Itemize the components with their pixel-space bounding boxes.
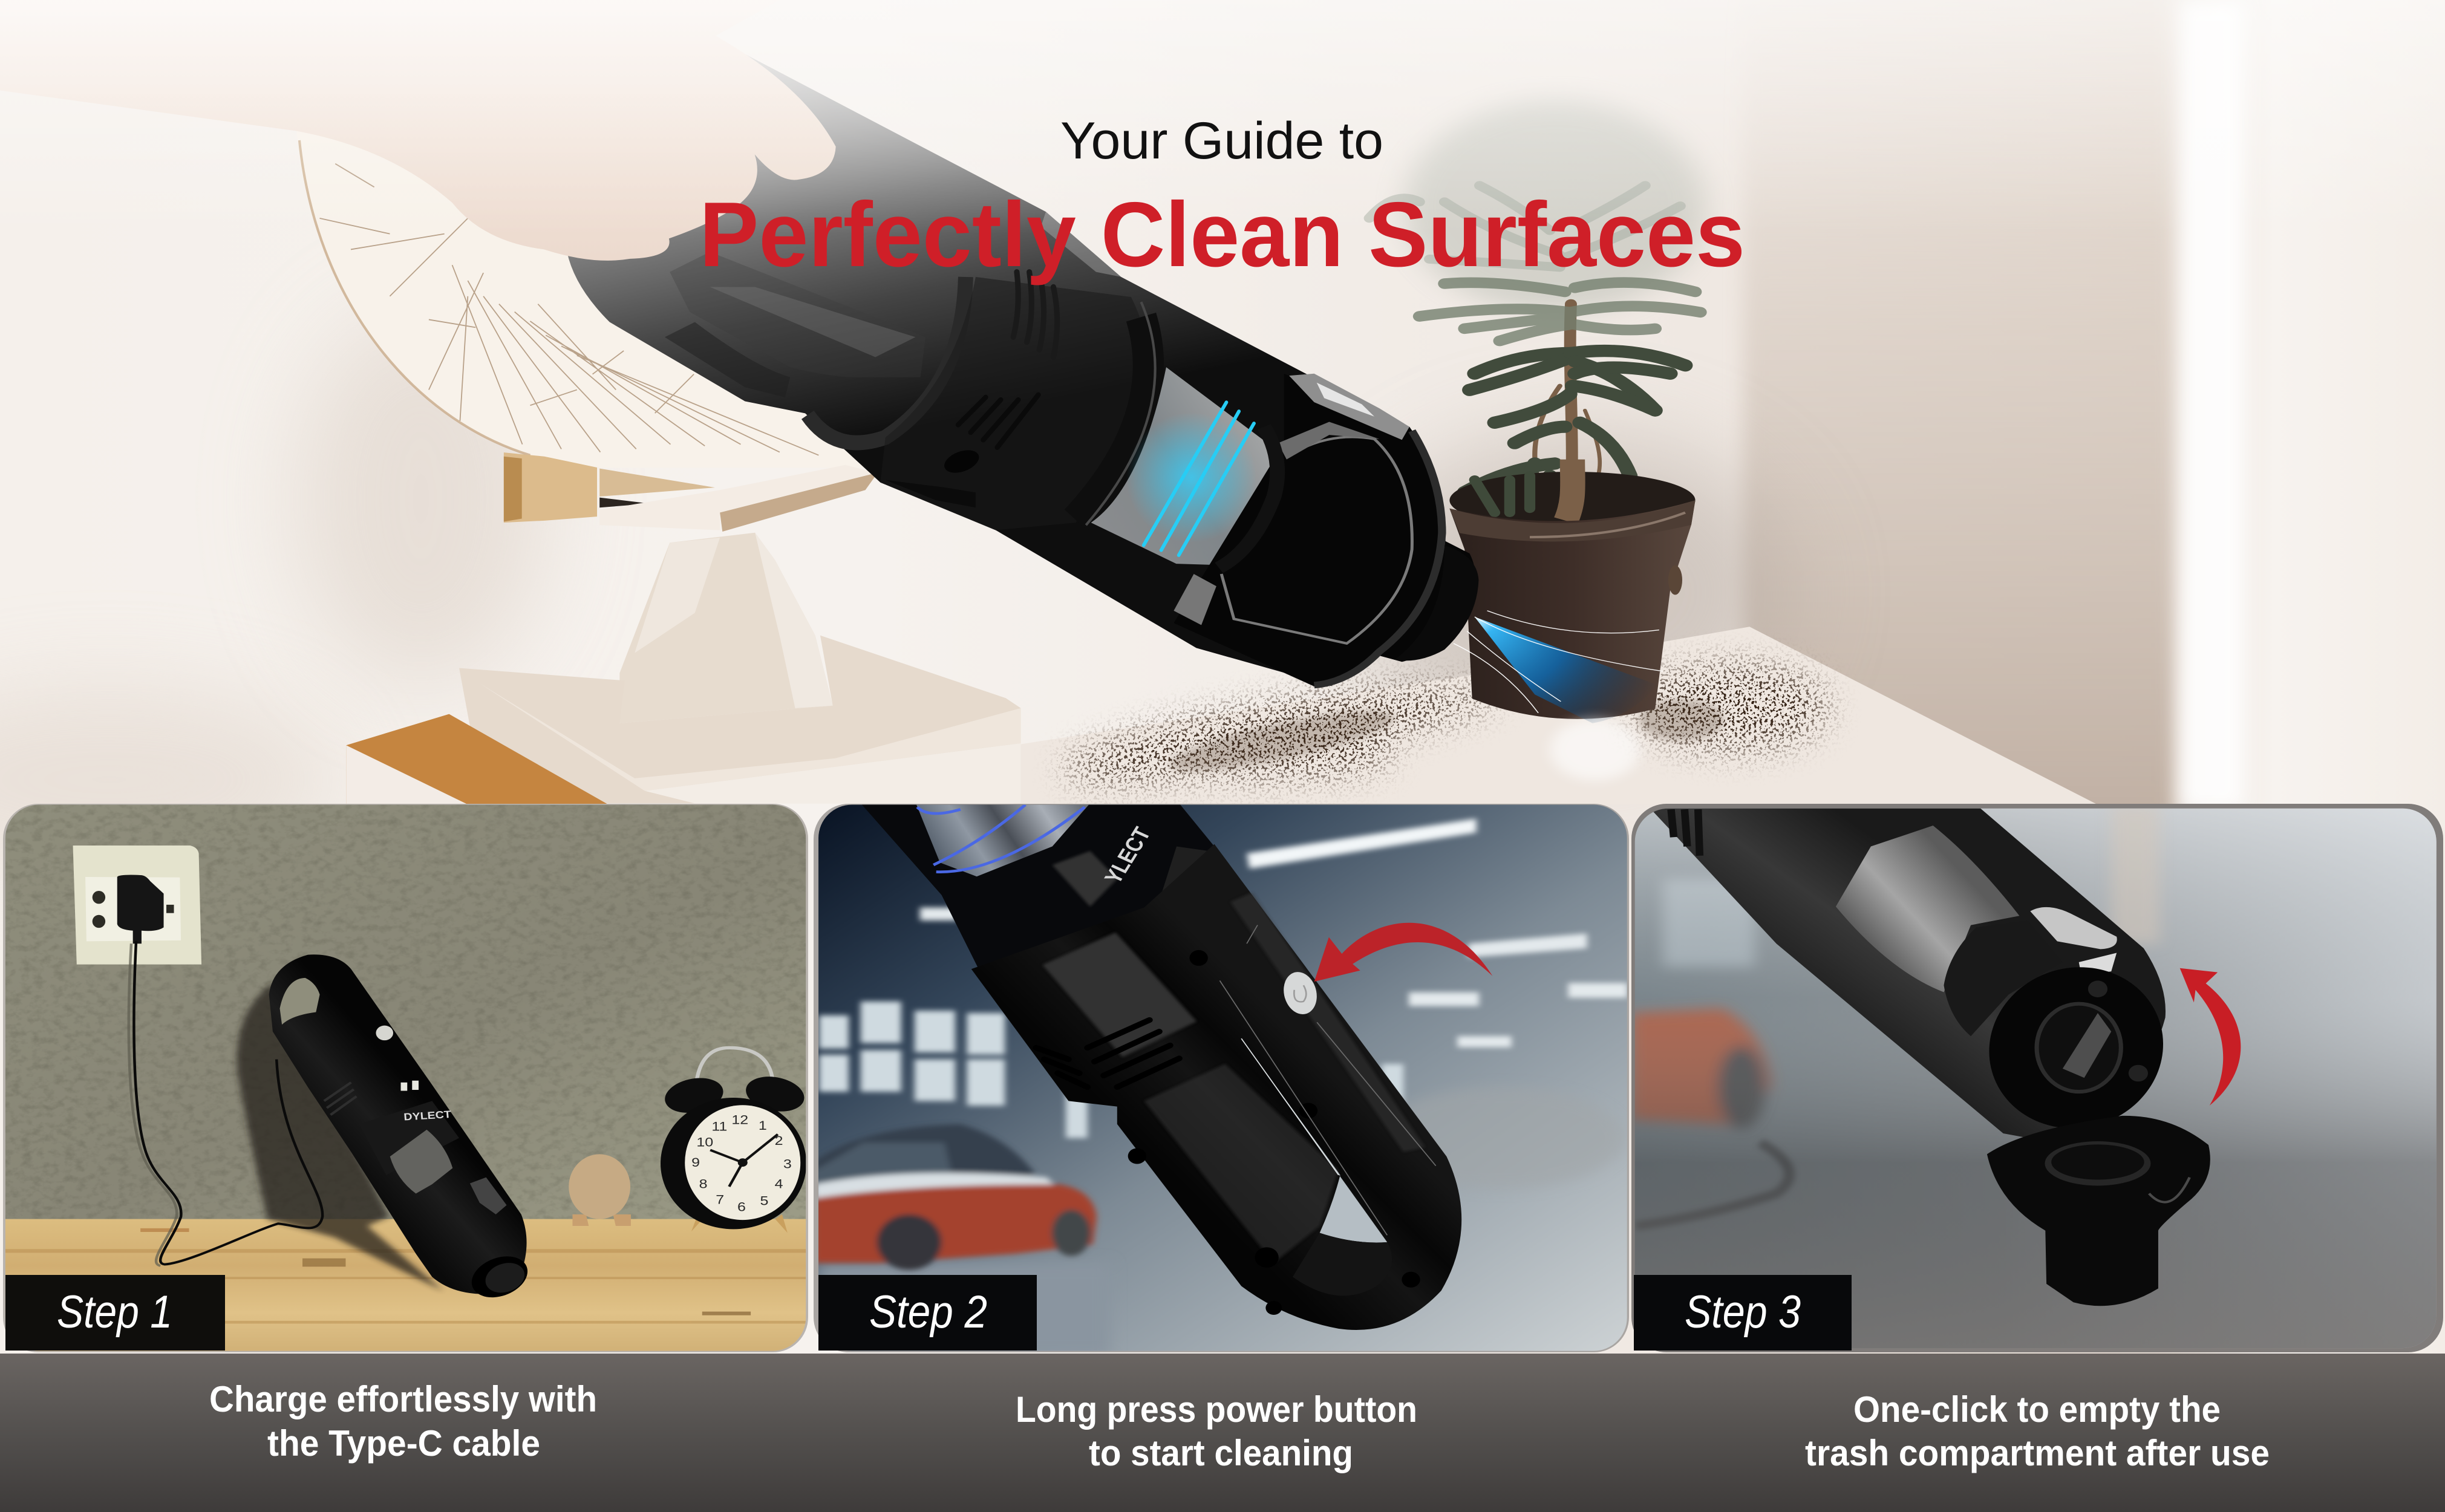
cable shadow: [129, 943, 177, 1266]
alarm clock: 5: [760, 1193, 768, 1208]
charger: [117, 875, 164, 943]
alarm clock: 9: [691, 1155, 700, 1170]
vent slots: [1013, 272, 1057, 357]
red curved arrow: [2180, 968, 2241, 1106]
caption: step 2: [1016, 1389, 1417, 1473]
dust bin opening: [1968, 950, 2184, 1145]
vent slots: [1036, 1020, 1179, 1087]
caption: step 3: [1805, 1389, 2270, 1473]
collar ring: [808, 277, 965, 443]
caption: step 3: trash compartment after use: [1805, 1433, 2270, 1473]
alarm clock: 7: [716, 1192, 724, 1207]
vacuum cleaner: [567, 49, 1663, 780]
wooden ornament: [569, 1154, 631, 1226]
step 1 label tag: [5, 1275, 225, 1351]
alarm clock: 2: [775, 1133, 783, 1148]
panel: step 1 charging: [0, 800, 815, 1353]
haze over top of scene: [0, 0, 2445, 234]
vacuum body: [567, 49, 1332, 686]
crystal stand: [619, 533, 833, 723]
power button: [1280, 969, 1320, 1017]
blurred garage windows: [819, 1002, 1403, 1142]
step 2 frame: [814, 804, 1629, 1352]
caption: step 3: One-click to empty the: [1853, 1389, 2221, 1430]
dust cup and end cap: [1174, 374, 1476, 686]
nozzle step 1: [463, 1248, 536, 1306]
vacuum shadow: [237, 983, 443, 1291]
open nozzle lid: [1987, 1116, 2210, 1306]
cap ring: [1314, 431, 1442, 685]
alarm clock: [661, 1048, 809, 1233]
step 1 frame: [3, 804, 808, 1352]
dense dirt piles: [1166, 699, 1724, 783]
alarm clock: 11: [711, 1119, 727, 1133]
step 1 label tag: Step 1: [57, 1286, 172, 1338]
silver latch: [2030, 907, 2117, 949]
alarm clock: 1: [759, 1118, 767, 1132]
title line 2: Perfectly Clean Surfaces: [699, 183, 1745, 286]
cup shards: [1278, 422, 1379, 460]
step 3 label tag: Step 3: [1685, 1286, 1801, 1338]
caption: step 1: [209, 1379, 597, 1464]
blurred floor: [818, 1263, 1110, 1355]
plant foliage: [1369, 100, 1705, 521]
wooden plate support: [504, 452, 878, 532]
suction blue spray: [1454, 611, 1663, 723]
caption: step 1: Charge effortlessly with: [209, 1379, 597, 1419]
highlight lines: [1219, 925, 1436, 1235]
blurred ceiling lights: [920, 819, 1628, 1048]
caption: step 2: to start cleaning: [1089, 1433, 1353, 1473]
mesh end: [1219, 427, 1278, 568]
filter mesh step 3: [1836, 826, 2019, 992]
second ring: [1076, 317, 1148, 520]
alarm clock: 4: [775, 1176, 783, 1191]
vacuum tube top: [858, 800, 1215, 976]
wall outlet: [73, 846, 201, 965]
panel: step 2 power button: [798, 800, 1641, 1355]
caption: step 1: the Type-C cable: [267, 1423, 540, 1464]
caption: step 2: Long press power button: [1016, 1389, 1417, 1430]
vacuum in step 1: [269, 954, 536, 1306]
vacuum main body with loop handle: [971, 844, 1461, 1330]
brand lettering: YLECT: [1099, 824, 1156, 887]
charging cable: [134, 941, 322, 1265]
filter mesh: [1091, 367, 1274, 565]
step 3 photo: [1631, 805, 2441, 1355]
clock face: [685, 1105, 800, 1220]
bottom dark gradient band: [0, 1354, 2445, 1512]
step 3 frame: [1631, 804, 2443, 1352]
alarm clock: 3: [783, 1156, 792, 1171]
hand: [0, 0, 2445, 261]
title line 1: Your Guide to: [1060, 112, 1383, 170]
vacuum tube: [1647, 805, 2184, 1145]
power slider: [1289, 374, 1409, 440]
cup window outline: [1221, 437, 1412, 644]
vacuum in step 1: DYLECT: [403, 1108, 452, 1123]
inner handle slot: [670, 252, 925, 377]
plate with crackle lines: [296, 128, 873, 468]
blurred red car and hose: [1631, 1008, 1771, 1129]
step 1 photo: [0, 800, 815, 1353]
cyan airflow lines: [1144, 402, 1254, 555]
alarm clock: 12: [731, 1112, 748, 1127]
blurred window and pillar: [1663, 879, 1755, 966]
spilled dirt: [1059, 665, 1827, 800]
white block with wood face: [346, 636, 1021, 804]
alarm clock: 8: [699, 1176, 708, 1191]
blurred red car: [815, 1124, 1097, 1270]
potted plant: [1369, 100, 1705, 719]
step 2 label tag: [818, 1275, 1037, 1351]
alarm clock: 6: [737, 1199, 746, 1214]
step 2 photo: [798, 800, 1641, 1355]
vent lines step 1: [324, 1083, 356, 1115]
alarm clock: 10: [696, 1135, 713, 1149]
panel: step 3 empty trash: [1631, 804, 2443, 1355]
title: [699, 112, 1745, 286]
filter mesh step 1: [390, 1130, 452, 1193]
plant pot: [1449, 460, 1696, 719]
handle opening: [1241, 1038, 1387, 1242]
nozzle: [1394, 546, 1478, 660]
wood shelf: [0, 1219, 815, 1353]
body sheen stripes: [1043, 893, 1425, 1263]
red curved arrow: [1314, 923, 1492, 982]
step 2 label tag: Step 2: [869, 1286, 987, 1338]
power button step 1: [376, 1026, 393, 1040]
body screws: [1128, 950, 1420, 1315]
step 3 label tag: [1634, 1275, 1852, 1351]
